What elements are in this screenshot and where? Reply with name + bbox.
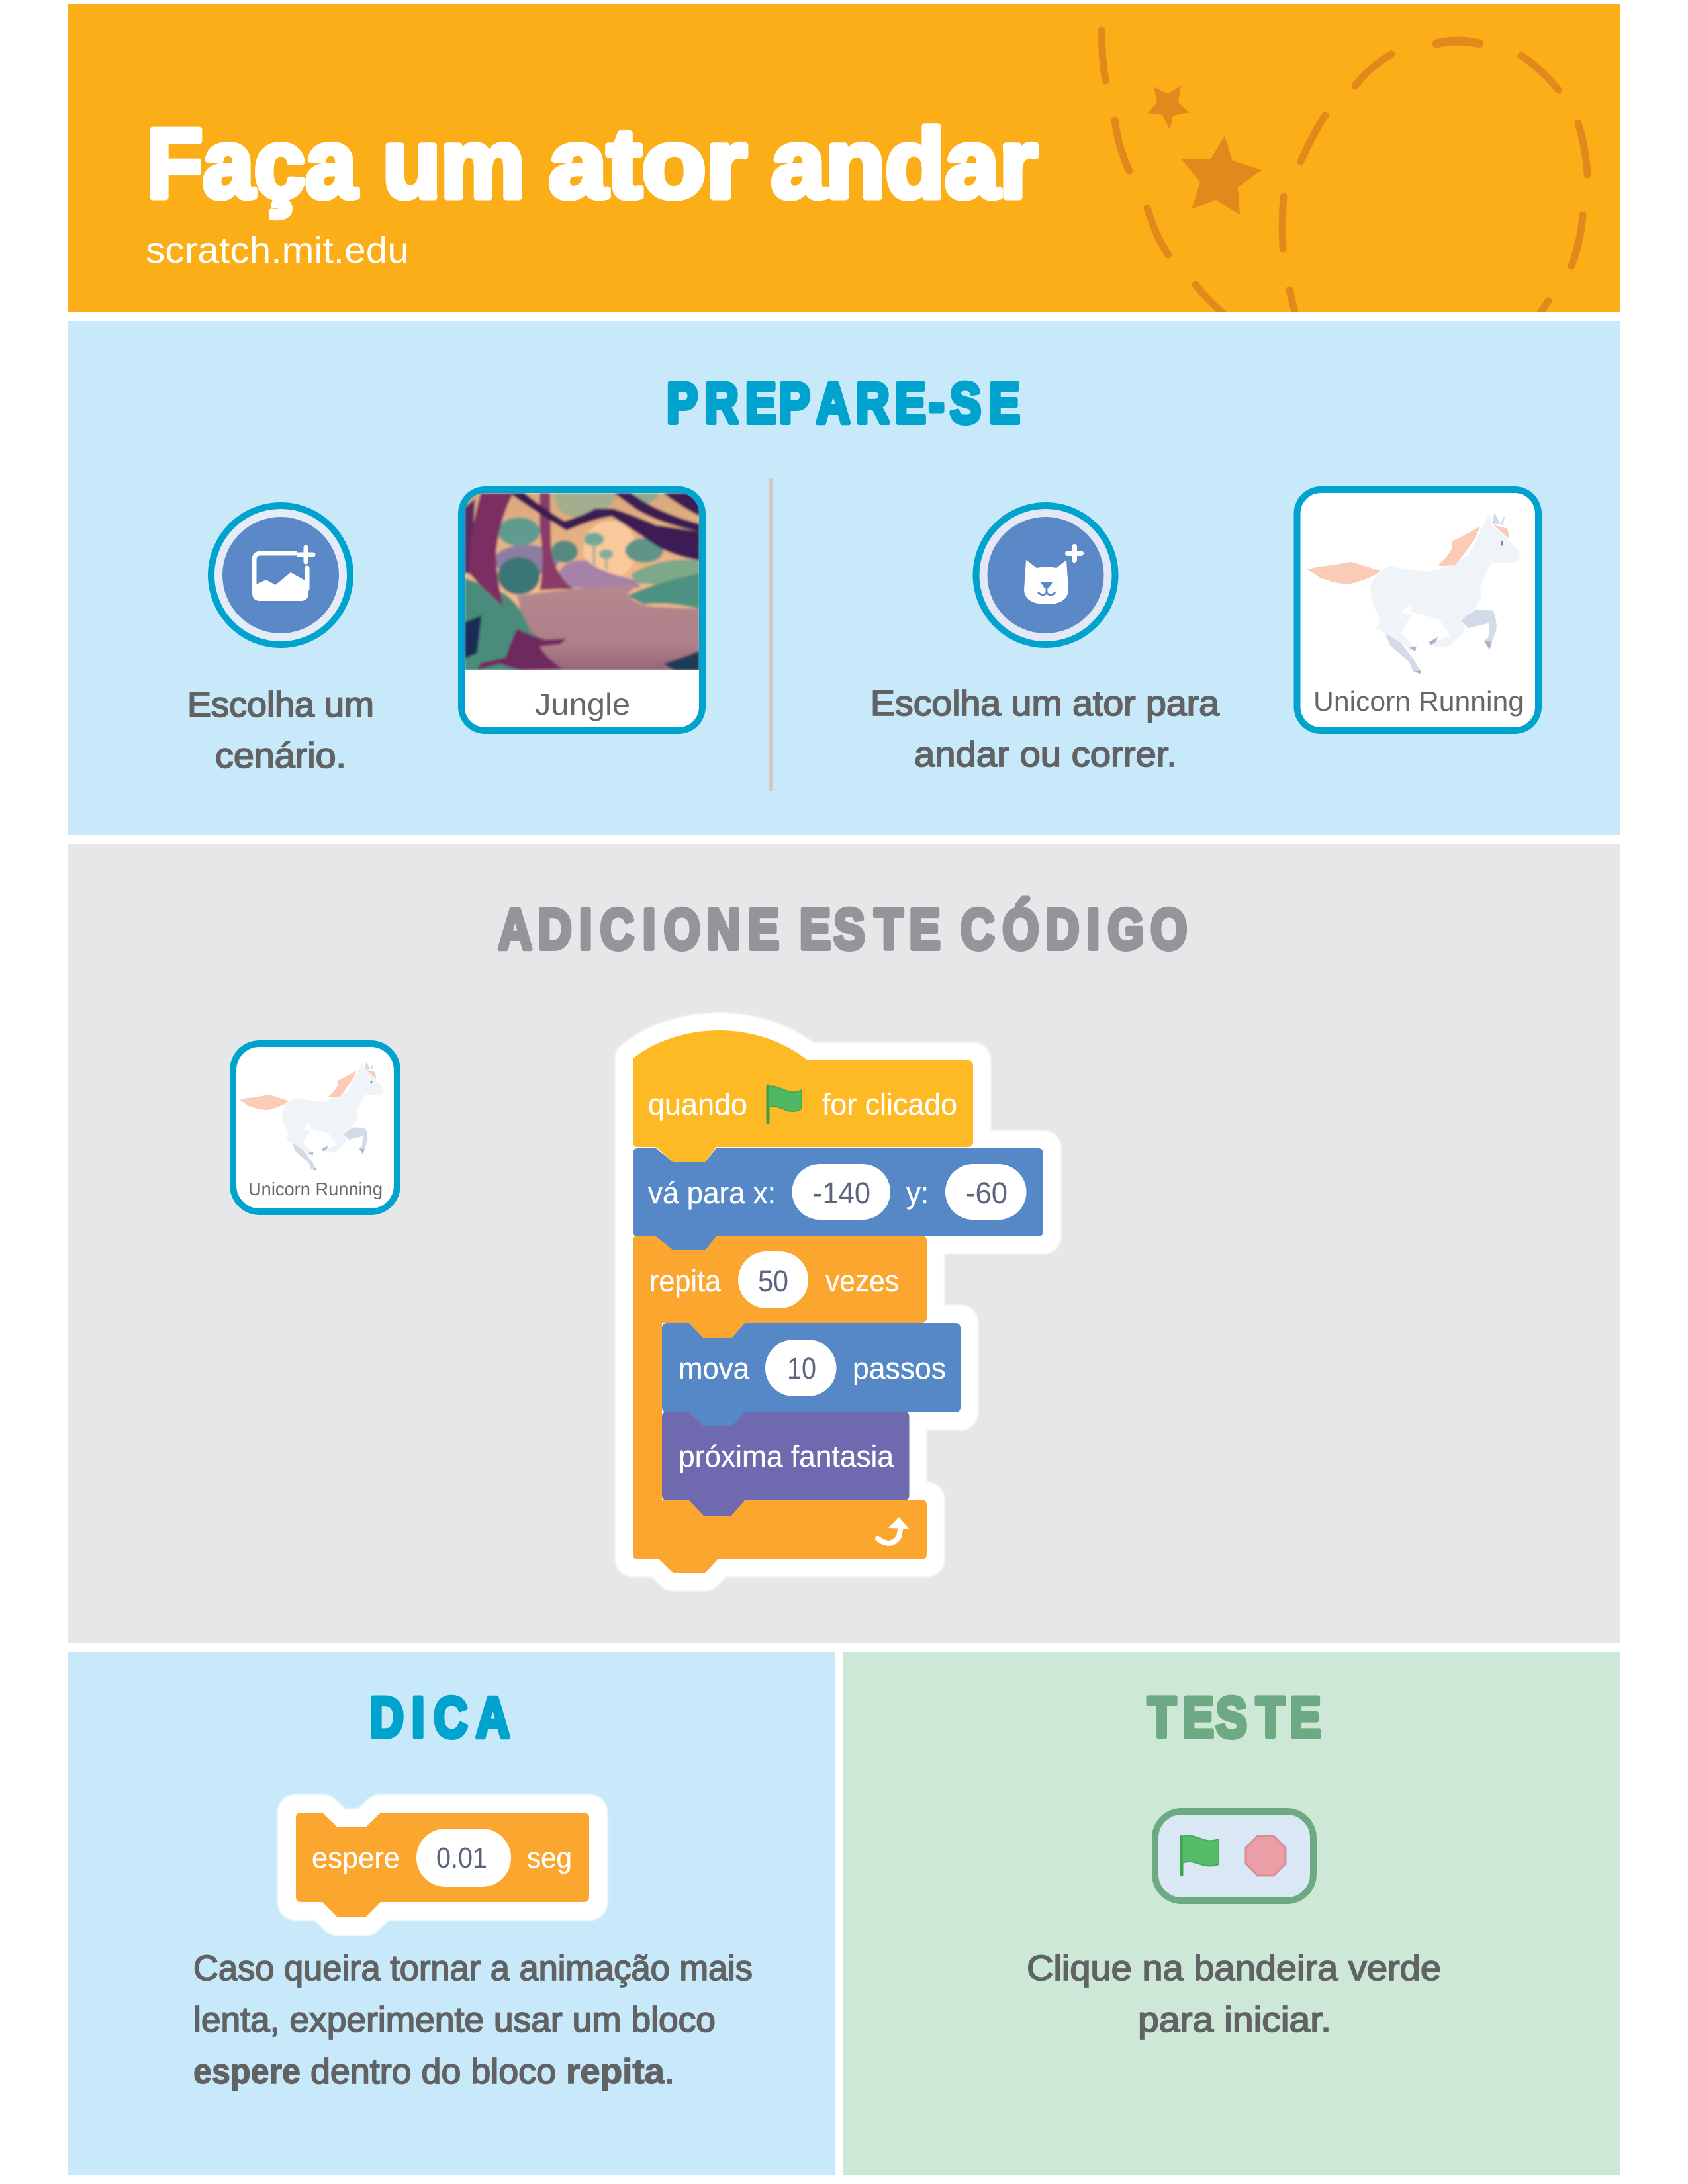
text: choose sprite: andar ou correr. bbox=[914, 735, 1177, 774]
block: move steps: 10 bbox=[787, 1351, 816, 1385]
block: move go to xy: vá para x: bbox=[648, 1176, 776, 1210]
block: move steps: mova bbox=[679, 1351, 750, 1385]
heading: adicione este codigo: ADICIONE ESTE CÓDIGO bbox=[498, 897, 1187, 961]
text: tip: Caso queira tornar a animação mais bbox=[193, 1948, 753, 1988]
text: tip: lenta, experimente usar um bloco bbox=[193, 2000, 716, 2040]
block: repeat bbox=[633, 1236, 927, 1573]
panel: teste bbox=[843, 1652, 1620, 2175]
text: choose backdrop: Escolha um bbox=[187, 685, 374, 725]
text: tip: . bbox=[665, 2052, 675, 2091]
block: when flag clicked: quando bbox=[648, 1087, 747, 1121]
image: jungle scene bbox=[465, 493, 700, 670]
block: repeat: vezes bbox=[825, 1264, 899, 1298]
block: when flag clicked bbox=[633, 1030, 973, 1162]
block: move steps: passos bbox=[853, 1351, 946, 1385]
header banner bbox=[68, 4, 1620, 318]
block: wait bbox=[296, 1813, 589, 1917]
icon: green flag bbox=[768, 1086, 802, 1122]
block: move steps bbox=[662, 1323, 961, 1426]
panel: prepare-se bbox=[68, 321, 1620, 835]
text: test: Clique na bandeira verde bbox=[1027, 1948, 1441, 1988]
text: tip: dentro do bloco bbox=[310, 2052, 556, 2091]
block: next costume bbox=[662, 1412, 910, 1516]
block: wait: 0.01 bbox=[436, 1842, 487, 1874]
block: move go to xy: -60 bbox=[966, 1176, 1008, 1210]
title: Faça bbox=[146, 109, 358, 218]
card: unicorn sprite bbox=[233, 1044, 397, 1212]
text: test bbox=[1027, 1948, 1441, 2040]
panel: dica bbox=[68, 1652, 835, 2175]
card: jungle backdrop bbox=[461, 490, 702, 731]
text: choose backdrop bbox=[187, 685, 374, 776]
label: unicorn running: Unicorn Running bbox=[1313, 686, 1524, 717]
block: move go to xy: y: bbox=[906, 1176, 929, 1210]
title bbox=[146, 109, 1037, 218]
card: unicorn running bbox=[1297, 490, 1538, 731]
block: repeat: repita bbox=[649, 1264, 722, 1298]
icon: choose sprite button bbox=[976, 506, 1115, 645]
text: test: para iniciar. bbox=[1138, 2000, 1331, 2040]
icon: flag and stop button bbox=[1155, 1811, 1313, 1901]
text: choose backdrop: cenário. bbox=[215, 736, 346, 776]
url: scratch.mit.edu bbox=[146, 229, 409, 271]
text: choose sprite bbox=[870, 684, 1220, 774]
block: next costume: próxima fantasia bbox=[679, 1439, 894, 1473]
code stack bbox=[633, 1030, 1043, 1573]
text: choose sprite: Escolha um ator para bbox=[870, 684, 1220, 723]
text: tip bbox=[193, 1948, 753, 2091]
heading: dica: DICA bbox=[370, 1686, 510, 1749]
image: unicorn bbox=[1307, 512, 1521, 674]
title: um bbox=[383, 109, 525, 218]
block: when flag clicked: for clicado bbox=[822, 1087, 957, 1121]
block: repeat: 50 bbox=[758, 1264, 788, 1298]
heading: teste: TESTE bbox=[1147, 1686, 1321, 1749]
title: ator bbox=[549, 109, 747, 218]
block: wait: espere bbox=[312, 1842, 400, 1874]
label: unicorn running small: Unicorn Running bbox=[248, 1179, 383, 1199]
heading: prepare-se: PREPARE-SE bbox=[667, 371, 1020, 435]
block: move go to xy bbox=[633, 1148, 1043, 1250]
label: jungle: Jungle bbox=[535, 687, 630, 721]
text: tip: espere bbox=[193, 2052, 301, 2091]
block: wait: seg bbox=[527, 1842, 572, 1874]
icon: choose backdrop button bbox=[211, 506, 350, 645]
decoration: dashed path and stars bbox=[1102, 30, 1587, 318]
image: unicorn small bbox=[240, 1061, 384, 1171]
icon: loop arrow bbox=[878, 1517, 909, 1543]
text: tip: repita bbox=[566, 2052, 665, 2091]
title: andar bbox=[771, 109, 1037, 218]
panel: adicione este codigo bbox=[68, 844, 1620, 1643]
block: move go to xy: -140 bbox=[813, 1176, 870, 1210]
